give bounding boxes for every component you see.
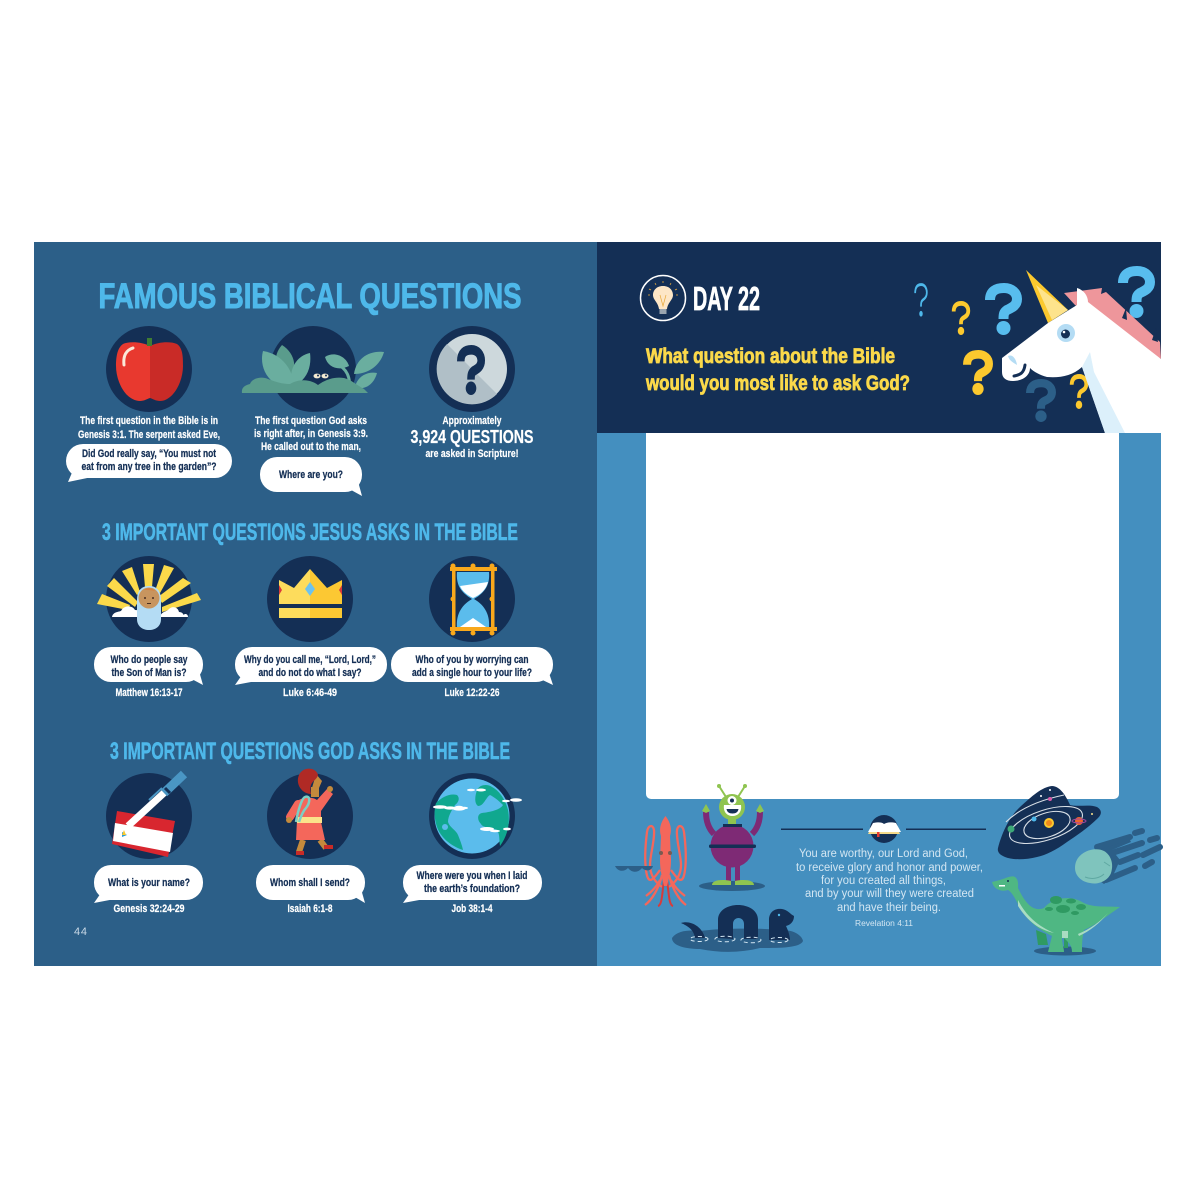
verse text: and by your will they were created: [805, 888, 974, 900]
verse text: and have their being.: [837, 902, 941, 914]
icon: red apple: [106, 326, 192, 412]
speech bubble: worrying: add a single hour to your life?: [412, 667, 532, 679]
icon: earth globe: [429, 773, 522, 859]
text: first question in the Bible: Genesis 3:1. The serpent asked Eve,: [78, 429, 220, 441]
panel: day 22 page: [597, 242, 1161, 966]
speech bubble: worrying: Who of you by worrying can: [416, 654, 529, 666]
icon: baby with rays: [97, 556, 201, 642]
verse text: for you created all things,: [821, 875, 946, 887]
speech bubble: serpent question: Did God really say, “You must not: [82, 448, 216, 460]
icon: light bulb: [640, 276, 686, 320]
text: 3,924 questions: Approximately: [442, 415, 502, 427]
icon: unicorn: [1002, 270, 1161, 433]
reference: Luke 12: Luke 12:22-26: [444, 687, 500, 699]
prompt question: What question about the Bible: [646, 345, 895, 368]
icon: sea monster: [672, 905, 803, 952]
speech bubble: earth's foundation: Where were you when I laid: [416, 870, 528, 882]
icon: walking messenger: [267, 769, 353, 859]
reference: Job: Job 38:1-4: [452, 903, 493, 915]
icon: question marks: [915, 271, 1150, 422]
speech bubble: whom shall I send: Whom shall I send?: [270, 877, 350, 889]
heading: questions God asks: 3 IMPORTANT QUESTIONS GOD ASKS IN THE BIBLE: [110, 738, 510, 765]
text: 3,924 questions: are asked in Scripture!: [426, 448, 518, 460]
text: first question in the Bible: The first question in the Bible is in: [80, 415, 218, 427]
text: 3,924 questions: 3,924 QUESTIONS: [410, 427, 534, 447]
speech bubble: Lord, Lord: [235, 647, 387, 685]
icon: crown: [267, 556, 353, 642]
page number: 44: [74, 926, 87, 938]
speech bubble: Lord, Lord: Why do you call me, “Lord, Lord,”: [244, 654, 376, 666]
heading: day 22: DAY 22: [693, 280, 760, 317]
verse text: to receive glory and honor and power,: [796, 862, 983, 874]
text: first question God asks: is right after, in Genesis 3:9.: [254, 428, 368, 440]
heading: questions Jesus asks: 3 IMPORTANT QUESTIONS JESUS ASKS IN THE BIBLE: [102, 519, 518, 546]
speech bubble: your name: [94, 865, 203, 903]
speech bubble: earth's foundation: [403, 865, 542, 903]
icon: question mark disc: [429, 326, 515, 412]
text: first question in the Bible: [78, 415, 220, 441]
icon: hourglass: [429, 556, 515, 642]
speech bubble: serpent question: eat from any tree in the garden”?: [82, 461, 217, 473]
speech bubble: son of man: Who do people say: [110, 654, 188, 666]
speech bubble: earth's foundation: the earth’s foundation?: [424, 883, 520, 895]
icon: one-eyed alien: [699, 784, 765, 891]
title: FAMOUS BIBLICAL QUESTIONS: [98, 277, 522, 316]
reference: Isaiah: Isaiah 6:1-8: [288, 903, 332, 915]
speech bubble: your name: What is your name?: [108, 877, 190, 889]
speech bubble: whom shall I send: [256, 865, 365, 903]
icon: water ripple: [615, 866, 653, 872]
icon: name tag and pen: [106, 773, 192, 859]
speech bubble: worrying: [391, 647, 553, 685]
speech bubble: where are you: Where are you?: [279, 469, 343, 481]
icon: solar system: [998, 786, 1101, 859]
icon: dinosaur: [992, 876, 1120, 956]
speech bubble: serpent question: [66, 444, 232, 482]
verse text: [796, 848, 983, 928]
icon: squid: [645, 816, 686, 906]
panel: famous biblical questions page: [34, 242, 597, 966]
verse text: Revelation 4:11: [855, 919, 914, 928]
icon: open book badge with dividers: [781, 815, 986, 843]
speech bubble: where are you: [260, 457, 362, 496]
speech bubble: son of man: [94, 647, 203, 685]
text: first question God asks: He called out to the man,: [261, 441, 361, 453]
text: first question God asks: [254, 415, 368, 453]
reference: Luke 6: Luke 6:46-49: [283, 687, 337, 699]
text: first question God asks: The first question God asks: [255, 415, 367, 427]
speech bubble: son of man: the Son of Man is?: [112, 667, 187, 679]
verse text: You are worthy, our Lord and God,: [799, 848, 968, 860]
text: 3,924 questions: [410, 415, 534, 460]
reference: Matthew: Matthew 16:13-17: [116, 687, 182, 699]
icon: comet: [1075, 831, 1160, 884]
reference: Genesis 32: Genesis 32:24-29: [114, 903, 184, 915]
icon: eyes hiding in bushes: [242, 326, 384, 412]
journaling box: [646, 433, 1119, 799]
prompt question: would you most like to ask God?: [645, 372, 910, 395]
prompt question: [645, 345, 910, 395]
speech bubble: Lord, Lord: and do not do what I say?: [258, 667, 362, 679]
